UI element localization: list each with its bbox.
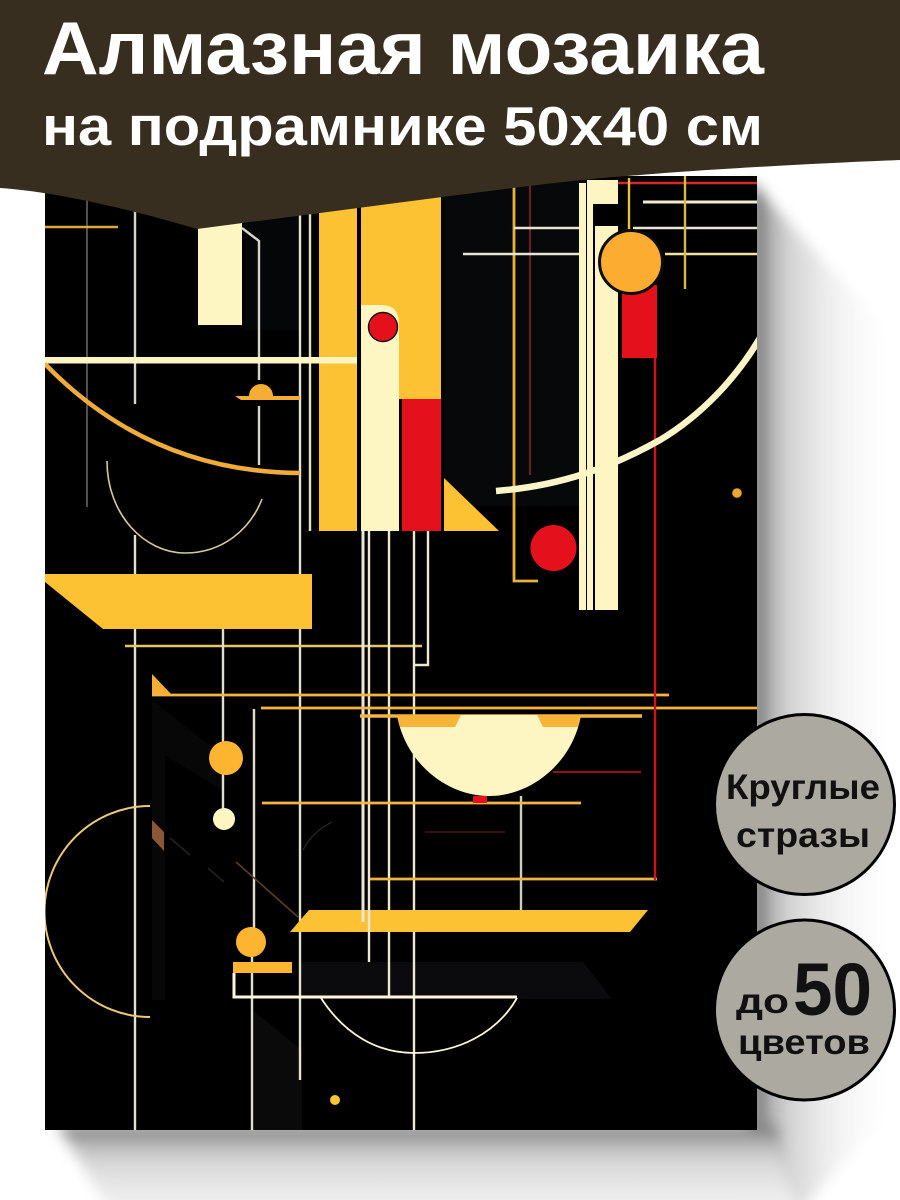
yellow trapezoid [45,574,312,629]
pendant circles [209,741,266,957]
brown diagonal details [152,820,332,917]
badge: up to 50 colours: цветов [738,1023,870,1062]
badge: round rhinestones: Круглые [726,768,880,807]
lines under trapezoid [125,645,422,647]
yellow parallelogram [290,910,648,932]
gold arc [45,364,300,473]
canvas artwork [45,176,760,1130]
vertical lines under columns [223,531,521,1130]
bowl [397,715,581,803]
title line 1: Алмазная мозаика [42,6,765,90]
banner [0,0,900,229]
dark background shapes [254,180,612,1130]
thin vertical lines, left [87,176,310,1130]
cream rectangle [198,223,242,325]
red lines [425,358,655,880]
red circle on column [368,312,398,342]
cream tall bars [579,180,618,610]
white frame and lower arc [234,973,517,1053]
red circle [530,525,576,571]
title line 2: на подрамнике 50х40 см [42,95,763,157]
orange circle [600,230,662,294]
small yellow dot [330,1095,340,1105]
large gold arc [45,806,150,1017]
badge: round rhinestones: стразы [736,816,870,855]
cream sweeping arc [496,338,760,491]
gold bar [233,962,292,973]
badge: round rhinestones [714,714,894,894]
small dome on plate [235,384,300,400]
top-right lines [463,176,757,581]
canvas shadow [58,180,890,1200]
gold horizontal lines [152,674,757,879]
red rectangle [622,285,657,358]
small orange dot [732,488,742,498]
badge: up to 50 colours: до [736,982,789,1021]
cream horizontal bar [45,357,357,364]
gold short line [45,226,118,228]
badge: up to 50 colours [714,920,894,1100]
thin arc [107,461,262,553]
badge: up to 50 colours: 50 [793,948,872,1031]
yellow columns [319,190,499,531]
